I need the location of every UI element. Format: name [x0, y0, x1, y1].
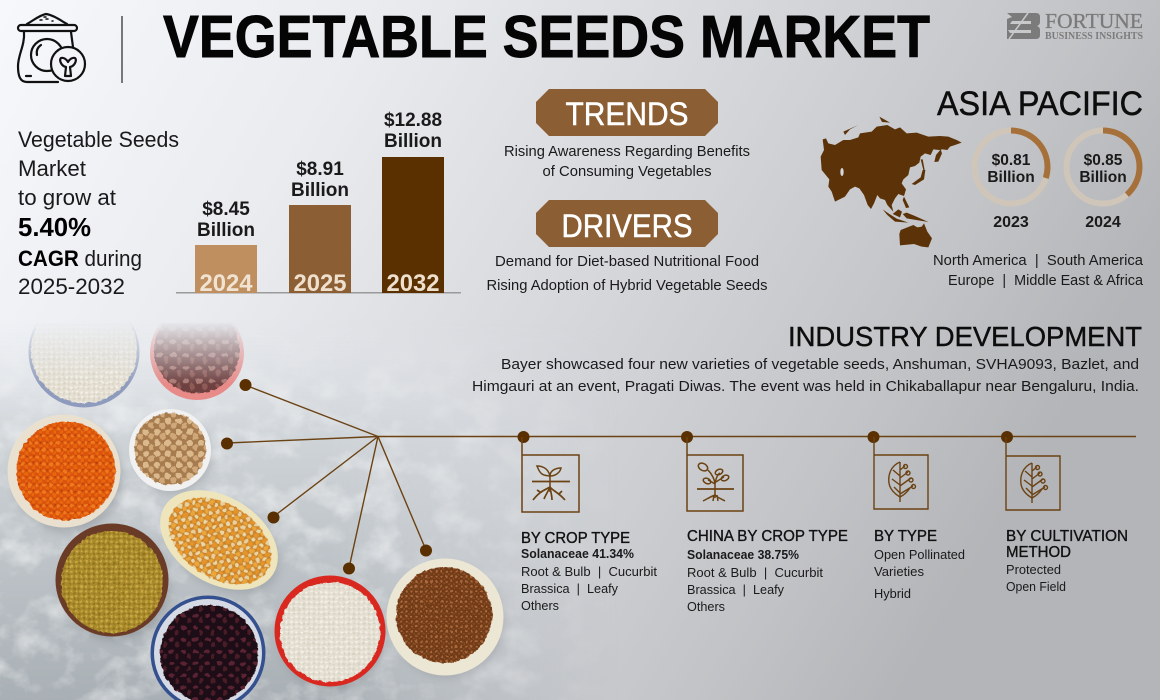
- banner: trends: TRENDS: [566, 96, 688, 132]
- panel: trends: [504, 89, 750, 180]
- icon: seedling with roots: [522, 437, 579, 512]
- panel: by cultivation method: BY CULTIVATION: [1006, 528, 1128, 545]
- donut: 2024: Billion: [1079, 169, 1127, 186]
- bar 2032: [382, 110, 444, 297]
- panel: by crop type: Brassica | Leafy: [521, 581, 618, 596]
- concrete surface texture: [0, 362, 550, 700]
- panel: by type: Open Pollinated: [874, 547, 965, 562]
- bowl: white rice top: [28, 327, 140, 408]
- text block: CAGR summary: Vegetable Seeds: [18, 127, 179, 152]
- donut: 2023: 2023: [993, 214, 1029, 231]
- photo: seed bowls: [8, 296, 504, 700]
- panel: drivers: Demand for Diet-based Nutritional Food: [495, 254, 759, 270]
- text block: CAGR summary: to grow at: [18, 185, 116, 210]
- bar 2032: Billion: [384, 131, 442, 152]
- bar 2025: $8.91: [296, 159, 344, 180]
- text block: other regions: [933, 253, 1144, 289]
- title: VEGETABLE SEEDS MARKET: [163, 4, 930, 70]
- panel: by type: Hybrid: [874, 586, 911, 601]
- text block: industry development: Bayer showcased four new varieties of vegetable seeds, Anshuman, SVHA9093, Bazlet, and: [501, 357, 1139, 373]
- bar 2024: Billion: [197, 220, 255, 241]
- icon: leaf with nodes: [874, 437, 928, 509]
- logo: Fortune Business Insights: [1007, 9, 1143, 42]
- bar 2024: 2024: [200, 270, 253, 297]
- panel: by type: Varieties: [874, 564, 924, 579]
- text block: industry development: [472, 357, 1139, 395]
- text block: other regions: North America | South America: [933, 253, 1144, 269]
- bowl: black beans: [150, 596, 266, 700]
- icon: seed bag: [18, 14, 85, 82]
- panel: china by crop type: CHINA BY CROP TYPE: [687, 528, 848, 545]
- panel: china by crop type: Brassica | Leafy: [687, 582, 784, 597]
- heading: industry development: INDUSTRY DEVELOPMENT: [788, 321, 1142, 352]
- text block: industry development: Himgauri at an event, Pragati Diwas. The event was held in Chikaballapur near Bengaluru, India.: [472, 379, 1139, 395]
- text block: CAGR summary: 2025-2032: [18, 274, 125, 299]
- donut: 2023: $0.81: [992, 152, 1031, 169]
- map: Caspian notch: [840, 168, 844, 176]
- text block: other regions: Europe | Middle East & Africa: [948, 273, 1144, 289]
- banner: drivers: DRIVERS: [562, 208, 692, 244]
- bar 2032: $12.88: [384, 110, 442, 131]
- panel: drivers: [486, 200, 768, 294]
- panel: by crop type: [521, 437, 657, 613]
- connector lines: [227, 385, 1136, 568]
- panel: china by crop type: Root & Bulb | Cucurbit: [687, 565, 823, 580]
- panel: china by crop type: [687, 437, 848, 614]
- connector dots: [221, 379, 1013, 574]
- panel: by crop type: Root & Bulb | Cucurbit: [521, 564, 657, 579]
- bar 2032: 2032: [386, 270, 440, 297]
- panel: china by crop type: Others: [687, 599, 725, 614]
- icon: leaf with nodes: [1006, 437, 1060, 510]
- bowl: buckwheat: [386, 558, 504, 677]
- divider: [121, 16, 123, 83]
- logo mark: [1007, 13, 1040, 39]
- bar chart: [176, 110, 461, 297]
- panel: by crop type: BY CROP TYPE: [521, 530, 630, 547]
- donut: 2024: $0.85: [1084, 152, 1123, 169]
- panel: trends: Rising Awareness Regarding Benefits: [504, 144, 750, 160]
- bowl: red lentils: [8, 414, 122, 532]
- panel: by cultivation method: METHOD: [1006, 544, 1071, 561]
- logo: Fortune Business Insights: FORTUNE: [1045, 9, 1143, 33]
- bowl: bulgur: [56, 524, 169, 640]
- map: Asia Pacific: [821, 117, 962, 247]
- text block: CAGR summary: Market: [18, 156, 86, 181]
- bowl: white rice in red bowl: [274, 576, 386, 690]
- panel: by cultivation method: Protected: [1006, 562, 1061, 577]
- text block: CAGR summary: 5.40%: [18, 212, 91, 242]
- panel: drivers: Rising Adoption of Hybrid Vegetable Seeds: [486, 278, 768, 294]
- bowl: chickpeas: [129, 409, 211, 494]
- panel: by cultivation method: Open Field: [1006, 579, 1066, 594]
- bar 2025: [289, 159, 351, 297]
- heading: Asia Pacific: ASIA PACIFIC: [937, 85, 1143, 123]
- icon: plant with roots: [687, 437, 743, 511]
- bar 2024: [195, 199, 257, 297]
- donut: 2023: [974, 130, 1048, 231]
- bar 2024: $8.45: [202, 199, 250, 220]
- panel: by type: [874, 437, 965, 601]
- panel: trends: of Consuming Vegetables: [542, 164, 712, 180]
- donut: 2024: [1066, 130, 1140, 231]
- panel: by type: BY TYPE: [874, 528, 937, 545]
- bar 2025: 2025: [294, 270, 346, 297]
- panel: china by crop type: Solanaceae 38.75%: [687, 548, 799, 562]
- bowl: corn kernels: [142, 470, 296, 612]
- panel: by crop type: Others: [521, 598, 559, 613]
- donut: 2023: Billion: [987, 169, 1035, 186]
- logo: Fortune Business Insights: BUSINESS INSIGHTS: [1045, 31, 1143, 42]
- banner: trends: [536, 89, 718, 136]
- donut: 2024: 2024: [1085, 214, 1121, 231]
- panel: by crop type: Solanaceae 41.34%: [521, 547, 634, 561]
- panel: by cultivation method: [1006, 437, 1128, 594]
- text block: CAGR summary: CAGR during: [18, 246, 142, 271]
- bowl: red beans top: [150, 325, 244, 400]
- text block: CAGR summary: [18, 127, 179, 299]
- bar 2025: Billion: [291, 180, 349, 201]
- banner: drivers: [536, 200, 718, 247]
